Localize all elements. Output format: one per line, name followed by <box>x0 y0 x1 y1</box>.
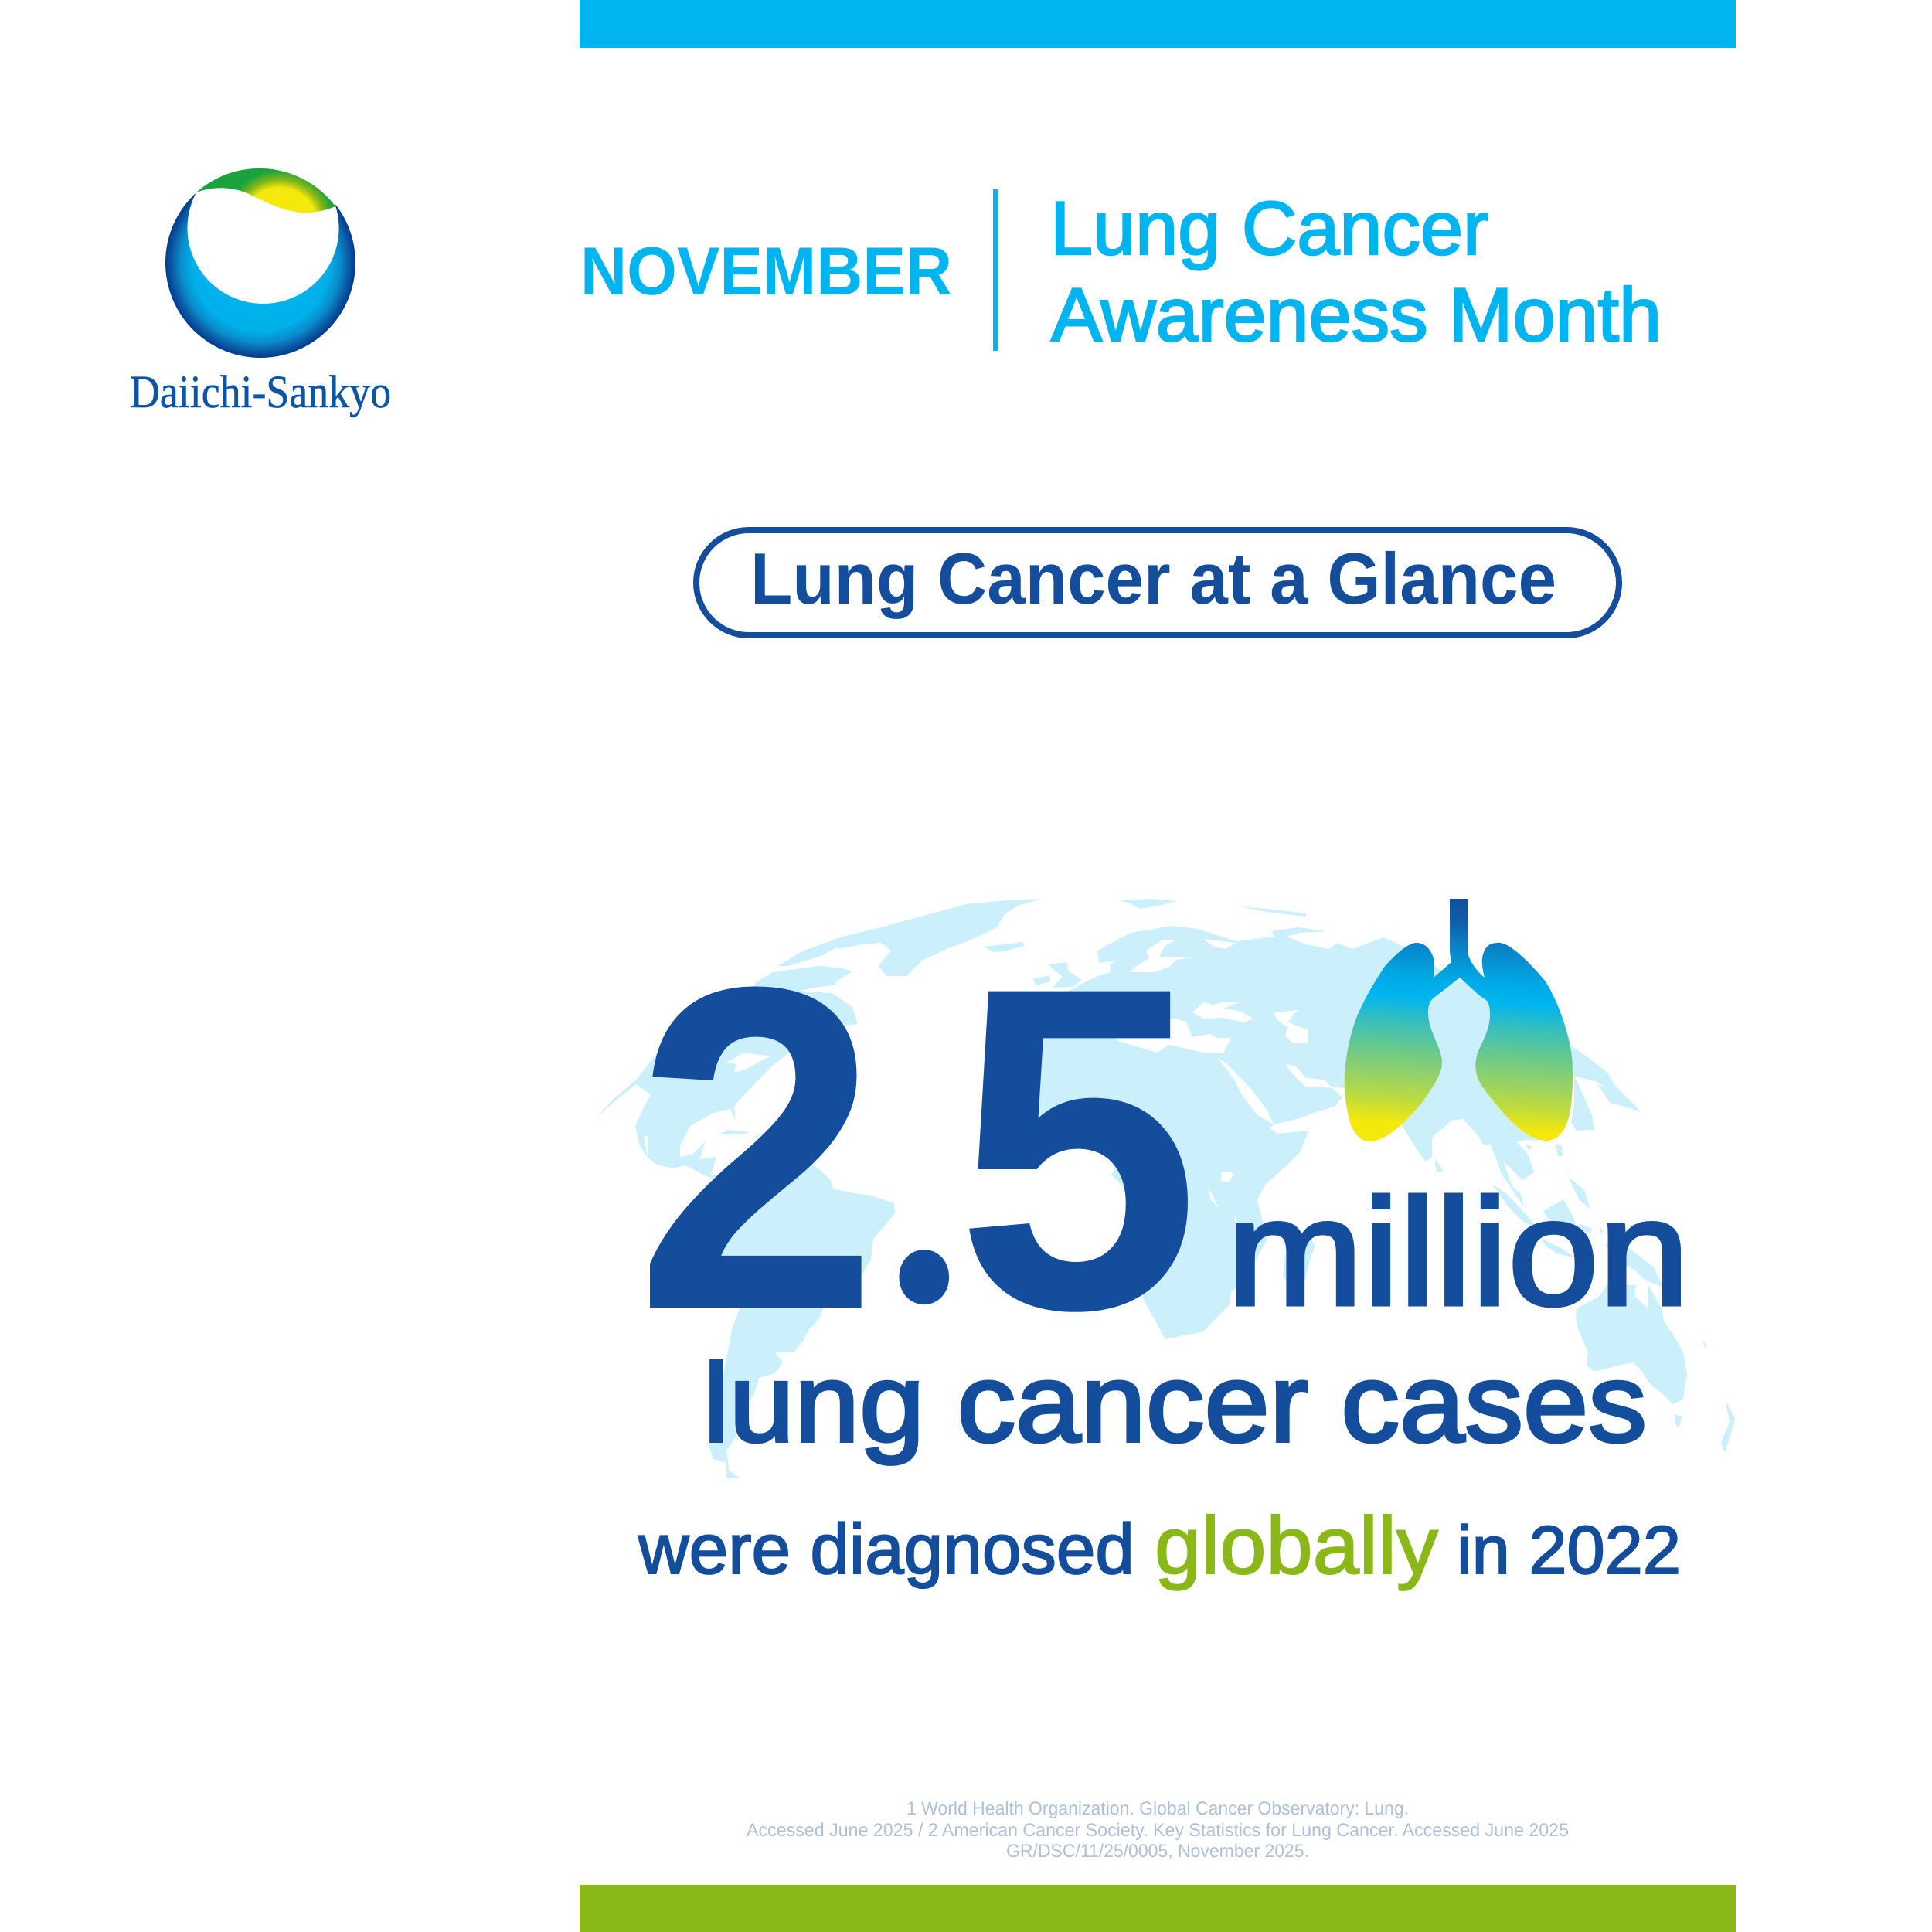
text: lung cancer cases: lung cancer cases <box>703 1341 1647 1465</box>
text: were diagnosed globally in 2022: in 2022 <box>1457 1512 1681 1588</box>
map: Australia <box>1576 1284 1687 1404</box>
top bar <box>580 0 1736 48</box>
text: were diagnosed globally in 2022 <box>638 1501 1681 1591</box>
map: Eurasia and Africa <box>992 926 1641 1339</box>
logo mark: white inner disc <box>187 152 338 304</box>
footnotes: GR/DSC/11/25/0005, November 2025. <box>1006 1841 1309 1862</box>
footnotes <box>747 1798 1569 1862</box>
big number: 2.5: 2 <box>634 892 879 1406</box>
map: Iceland, Svalbard, Arctic islands <box>984 899 1306 952</box>
header: Lung Cancer Awareness Month <box>1050 185 1662 357</box>
logo wordmark: Daiichi-Sankyo <box>130 366 391 417</box>
header: Lung Cancer Awareness Month: Lung Cancer <box>1050 185 1488 270</box>
map: South America <box>709 1158 895 1478</box>
logo mark: blue crescent <box>165 168 355 358</box>
map: Southeast Asia islands <box>1493 1162 1604 1258</box>
footnotes: Accessed June 2025 / 2 American Cancer Society. Key Statistics for Lung Cancer. Accessed June 2025 <box>747 1820 1569 1841</box>
map: Sri Lanka, Hainan <box>1435 1144 1563 1172</box>
text: globally highlight: globally <box>1155 1501 1439 1591</box>
icon: lungs <box>1345 899 1573 1141</box>
map: Tasmania and New Zealand <box>1675 1338 1735 1453</box>
footnotes: 1 World Health Organization. Global Cancer Observatory: Lung. <box>906 1798 1409 1819</box>
map: inland seas and lakes <box>644 939 1349 1223</box>
header divider <box>993 189 998 351</box>
pill heading: Lung Cancer at a Glance <box>750 538 1556 619</box>
world map background <box>580 899 1735 1478</box>
map: Madagascar <box>1283 1239 1315 1289</box>
map: North America <box>580 985 858 1182</box>
map: Far East, Korea, Japan <box>1571 1076 1641 1131</box>
header: November: NOVEMBER <box>580 233 952 309</box>
logo mark: green and yellow cap <box>196 168 335 213</box>
header: Lung Cancer Awareness Month: Awareness Month <box>1051 272 1662 357</box>
map: Arctic Canada <box>755 927 881 993</box>
text: million: million <box>1227 1168 1689 1337</box>
logo: Daiichi-Sankyo <box>130 152 391 417</box>
map: New Guinea <box>1605 1244 1664 1288</box>
bottom bar <box>580 1885 1736 1932</box>
big number: 2.5: . <box>879 969 968 1383</box>
text: were diagnosed globally in 2022: were diagnosed <box>638 1510 1134 1589</box>
map: British Isles <box>1033 962 1082 988</box>
big number: 2.5: 5 <box>956 892 1200 1406</box>
map: Caribbean islands <box>719 1130 770 1138</box>
map: Greenland <box>837 899 1041 976</box>
